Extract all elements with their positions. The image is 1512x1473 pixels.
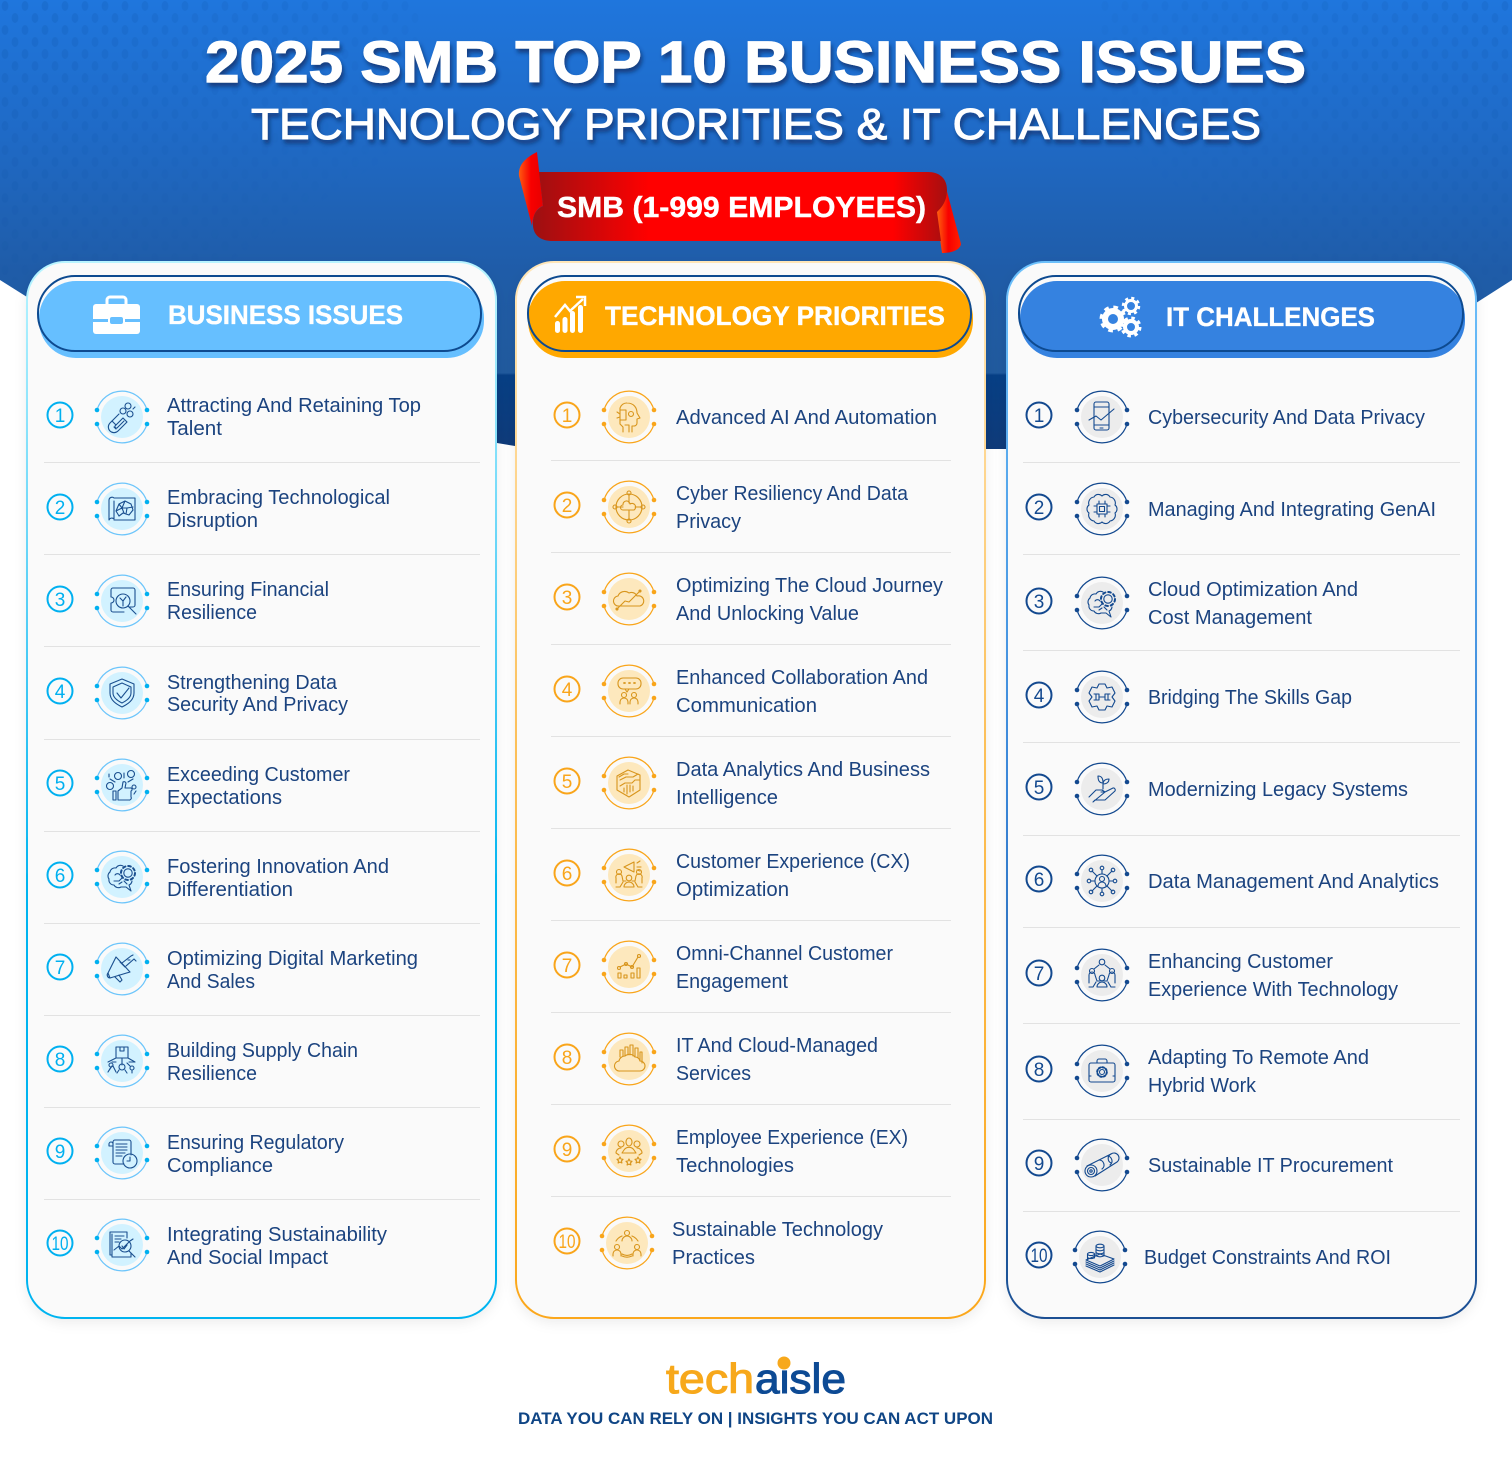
row 8 [48, 1035, 358, 1087]
number 4: 4 [562, 680, 573, 701]
icon: documents and magnifier [95, 1219, 149, 1271]
row 5 [1026, 763, 1408, 815]
label: Practices [672, 1247, 755, 1269]
icon: map with brain [95, 483, 149, 535]
label: Fostering Innovation And [167, 856, 389, 878]
label [1148, 1047, 1369, 1097]
number 4: 4 [1034, 686, 1045, 707]
label: Security And Privacy [167, 694, 348, 716]
number 9 [554, 1136, 580, 1162]
ribbon left fold [519, 152, 543, 226]
label: Disruption [167, 510, 258, 532]
ribbon right fold [936, 184, 961, 253]
number 1 [554, 402, 580, 428]
row 3 [1026, 577, 1358, 629]
number 8: 8 [562, 1048, 572, 1069]
row 5 [554, 757, 930, 809]
label: Experience With Technology [1148, 979, 1398, 1001]
label: Privacy [676, 511, 741, 533]
row 7 [1026, 949, 1398, 1001]
number 5 [1026, 774, 1052, 800]
label: Strengthening Data [167, 672, 338, 694]
number 5 [48, 770, 72, 796]
label: Ensuring Financial [167, 579, 329, 601]
label [676, 851, 910, 901]
label: And Social Impact [167, 1247, 328, 1269]
panel: business issues [27, 262, 496, 1318]
icon: coins and money stack [1073, 1231, 1127, 1283]
label [167, 1132, 344, 1177]
number 9: 9 [55, 1142, 65, 1163]
number 9 [48, 1138, 72, 1164]
label: Engagement [676, 971, 788, 993]
label: Building Supply Chain [167, 1040, 358, 1062]
panel: technology priorities [516, 262, 985, 1318]
heading pill: IT challenges [1019, 276, 1465, 358]
subtitle: TECHNOLOGY PRIORITIES & IT CHALLENGES [251, 100, 1261, 149]
number 3 [554, 584, 580, 610]
row 7 [554, 941, 893, 993]
number 2: 2 [1034, 498, 1044, 519]
icon: circuit hexagon [602, 757, 656, 809]
label [167, 856, 389, 901]
icon: gear with plug [1075, 671, 1129, 723]
label [676, 483, 909, 533]
row 2 [1026, 483, 1436, 535]
label: Talent [167, 418, 222, 440]
label: Sustainable IT Procurement [1148, 1155, 1393, 1177]
number 2 [48, 494, 72, 520]
label: Budget Constraints And ROI [1144, 1247, 1391, 1269]
title: 2025 SMB TOP 10 BUSINESS ISSUES [205, 30, 1306, 95]
label: Integrating Sustainability [167, 1224, 387, 1246]
row 3 [48, 575, 329, 627]
number 1 [1026, 402, 1052, 428]
icon: rolled log [1075, 1139, 1129, 1191]
ribbon banner [519, 152, 961, 253]
number 8 [48, 1046, 72, 1072]
label [676, 1127, 908, 1177]
label [1148, 579, 1358, 629]
label: Attracting And Retaining Top [167, 395, 421, 417]
number 4 [1026, 682, 1052, 708]
heading text: IT CHALLENGES [1166, 302, 1375, 332]
number 6: 6 [1034, 870, 1044, 891]
label [167, 1040, 358, 1085]
icon: brain with gear [95, 851, 149, 903]
number 2: 2 [562, 496, 572, 517]
label [1148, 951, 1398, 1001]
icon: phone with check [1075, 391, 1129, 443]
label: Compliance [167, 1155, 273, 1177]
row 4 [554, 665, 928, 717]
logo: techaisle: aisle [755, 1355, 846, 1402]
number 1: 1 [55, 406, 65, 427]
number 2 [1026, 494, 1052, 520]
label [676, 759, 930, 809]
icon: cloud with trend [602, 573, 656, 625]
row 1 [48, 391, 421, 443]
row 7 [48, 943, 418, 995]
number 1 [48, 402, 72, 428]
label: Cloud Optimization And [1148, 579, 1358, 601]
heading text: BUSINESS ISSUES [168, 300, 403, 330]
icon: box network [95, 1035, 149, 1087]
number 10: 10 [558, 1232, 576, 1253]
icon: hand with plant [1075, 763, 1129, 815]
row 1 [1026, 391, 1425, 443]
row 10 [1026, 1231, 1391, 1283]
icon: team meeting [1075, 949, 1129, 1001]
label: Cyber Resiliency And Data [676, 483, 909, 505]
number 10: 10 [1030, 1246, 1048, 1267]
label: Optimization [676, 879, 789, 901]
row 10 [554, 1217, 883, 1269]
label: Advanced AI And Automation [676, 407, 937, 429]
label: Resilience [167, 602, 257, 624]
label: Cybersecurity And Data Privacy [1148, 407, 1425, 429]
label [167, 487, 390, 532]
icon: gears [1102, 298, 1140, 336]
icon: cloud with bars [602, 1033, 656, 1085]
number 4: 4 [55, 682, 66, 703]
label: And Sales [167, 971, 255, 993]
icon: line and bar chart [602, 941, 656, 993]
row 8 [554, 1033, 878, 1085]
row 10 [48, 1219, 387, 1271]
icon: person hub [1075, 855, 1129, 907]
icon: speech bubble with people [602, 665, 656, 717]
label: Enhancing Customer [1148, 951, 1333, 973]
label: Technologies [676, 1155, 794, 1177]
number 7: 7 [55, 958, 65, 979]
number 8: 8 [55, 1050, 65, 1071]
label [676, 1035, 878, 1085]
label: Differentiation [167, 879, 293, 901]
number 3: 3 [1034, 592, 1044, 613]
row 1 [554, 391, 937, 443]
row 9 [1026, 1139, 1393, 1191]
label: Embracing Technological [167, 487, 390, 509]
label: And Unlocking Value [676, 603, 859, 625]
icon: target cloud [602, 481, 656, 533]
icon: brain chip [1075, 483, 1129, 535]
row 3 [554, 573, 943, 625]
label: Data Management And Analytics [1148, 871, 1439, 893]
number 7 [48, 954, 72, 980]
label: Expectations [167, 787, 282, 809]
icon: magnet [95, 391, 149, 443]
logo: techaisle: tech [666, 1355, 754, 1402]
label: IT And Cloud-Managed [676, 1035, 878, 1057]
logo: techaisle [666, 1355, 846, 1402]
row 2 [48, 483, 390, 535]
label: Enhanced Collaboration And [676, 667, 928, 689]
number 8: 8 [1034, 1060, 1044, 1081]
number 2: 2 [55, 498, 65, 519]
number 7 [1026, 960, 1052, 986]
icon: brain with gear [1075, 577, 1129, 629]
heading pill: business issues [38, 276, 484, 358]
label: Managing And Integrating GenAI [1148, 499, 1436, 521]
icon: megaphone [95, 943, 149, 995]
row 8 [1026, 1045, 1369, 1097]
ribbon text: SMB (1-999 EMPLOYEES) [557, 192, 926, 224]
number 10: 10 [52, 1234, 68, 1255]
label [167, 764, 350, 809]
label [167, 672, 348, 716]
row 6 [1026, 855, 1439, 907]
panel: IT challenges [1007, 262, 1476, 1318]
number 6: 6 [55, 866, 65, 887]
header background [0, 0, 1512, 449]
number 4 [554, 676, 580, 702]
label: Ensuring Regulatory [167, 1132, 344, 1154]
label: Communication [676, 695, 817, 717]
number 7 [554, 952, 580, 978]
row 2 [554, 481, 909, 533]
number 3 [48, 586, 72, 612]
icon: meeting with megaphone [602, 849, 656, 901]
label [676, 943, 893, 993]
icon: thumbs up and smileys [95, 759, 149, 811]
label: Data Analytics And Business [676, 759, 930, 781]
label: Employee Experience (EX) [676, 1127, 908, 1149]
number 6 [48, 862, 72, 888]
label: Sustainable Technology [672, 1219, 883, 1241]
number 9: 9 [1034, 1154, 1044, 1175]
label: Optimizing The Cloud Journey [676, 575, 943, 597]
icon: rising bar chart [555, 297, 585, 333]
number 7: 7 [562, 956, 572, 977]
label: Cost Management [1148, 607, 1312, 629]
row 6 [48, 851, 389, 903]
row 5 [48, 759, 350, 811]
label [672, 1219, 883, 1269]
row 4 [1026, 671, 1352, 723]
number 1: 1 [562, 406, 572, 427]
icon: puzzle and magnifier [95, 575, 149, 627]
number 1: 1 [1034, 406, 1044, 427]
number 7: 7 [1034, 964, 1044, 985]
label: Customer Experience (CX) [676, 851, 910, 873]
icon: document and clock [95, 1127, 149, 1179]
number 8 [554, 1044, 580, 1070]
icon: briefcase [93, 297, 140, 334]
row 9 [48, 1127, 344, 1179]
label [167, 1224, 387, 1269]
number 9 [1026, 1150, 1052, 1176]
label: Hybrid Work [1148, 1075, 1257, 1097]
tagline: DATA YOU CAN RELY ON | INSIGHTS YOU CAN ACT UPON [518, 1409, 993, 1428]
label: Adapting To Remote And [1148, 1047, 1369, 1069]
number 6 [1026, 866, 1052, 892]
label: Exceeding Customer [167, 764, 350, 786]
number 5: 5 [55, 774, 65, 795]
icon: people around a circle [600, 1217, 654, 1269]
label [167, 948, 418, 993]
number 8 [1026, 1056, 1052, 1082]
number 2 [554, 492, 580, 518]
number 6: 6 [562, 864, 572, 885]
label [676, 667, 928, 717]
row 9 [554, 1125, 908, 1177]
number 5 [554, 768, 580, 794]
row 6 [554, 849, 910, 901]
icon: AI head [602, 391, 656, 443]
number 5: 5 [562, 772, 572, 793]
label: Intelligence [676, 787, 778, 809]
number 3 [1026, 588, 1052, 614]
heading text: TECHNOLOGY PRIORITIES [605, 301, 945, 331]
ribbon body [533, 172, 947, 241]
number 3: 3 [55, 590, 65, 611]
number 5: 5 [1034, 778, 1044, 799]
label [167, 579, 329, 624]
number 3: 3 [562, 588, 572, 609]
number 6 [554, 860, 580, 886]
label [676, 575, 943, 625]
heading pill: technology priorities [528, 276, 973, 358]
label [167, 395, 421, 440]
number 4 [48, 678, 72, 704]
icon: shield with check [95, 667, 149, 719]
icon: team with stars [602, 1125, 656, 1177]
label: Optimizing Digital Marketing [167, 948, 418, 970]
label: Omni-Channel Customer [676, 943, 893, 965]
row 4 [48, 667, 348, 719]
label: Bridging The Skills Gap [1148, 687, 1352, 709]
label: Services [676, 1063, 751, 1085]
number 9: 9 [562, 1140, 572, 1161]
label: Modernizing Legacy Systems [1148, 779, 1408, 801]
label: Resilience [167, 1063, 257, 1085]
icon: case with gear [1075, 1045, 1129, 1097]
